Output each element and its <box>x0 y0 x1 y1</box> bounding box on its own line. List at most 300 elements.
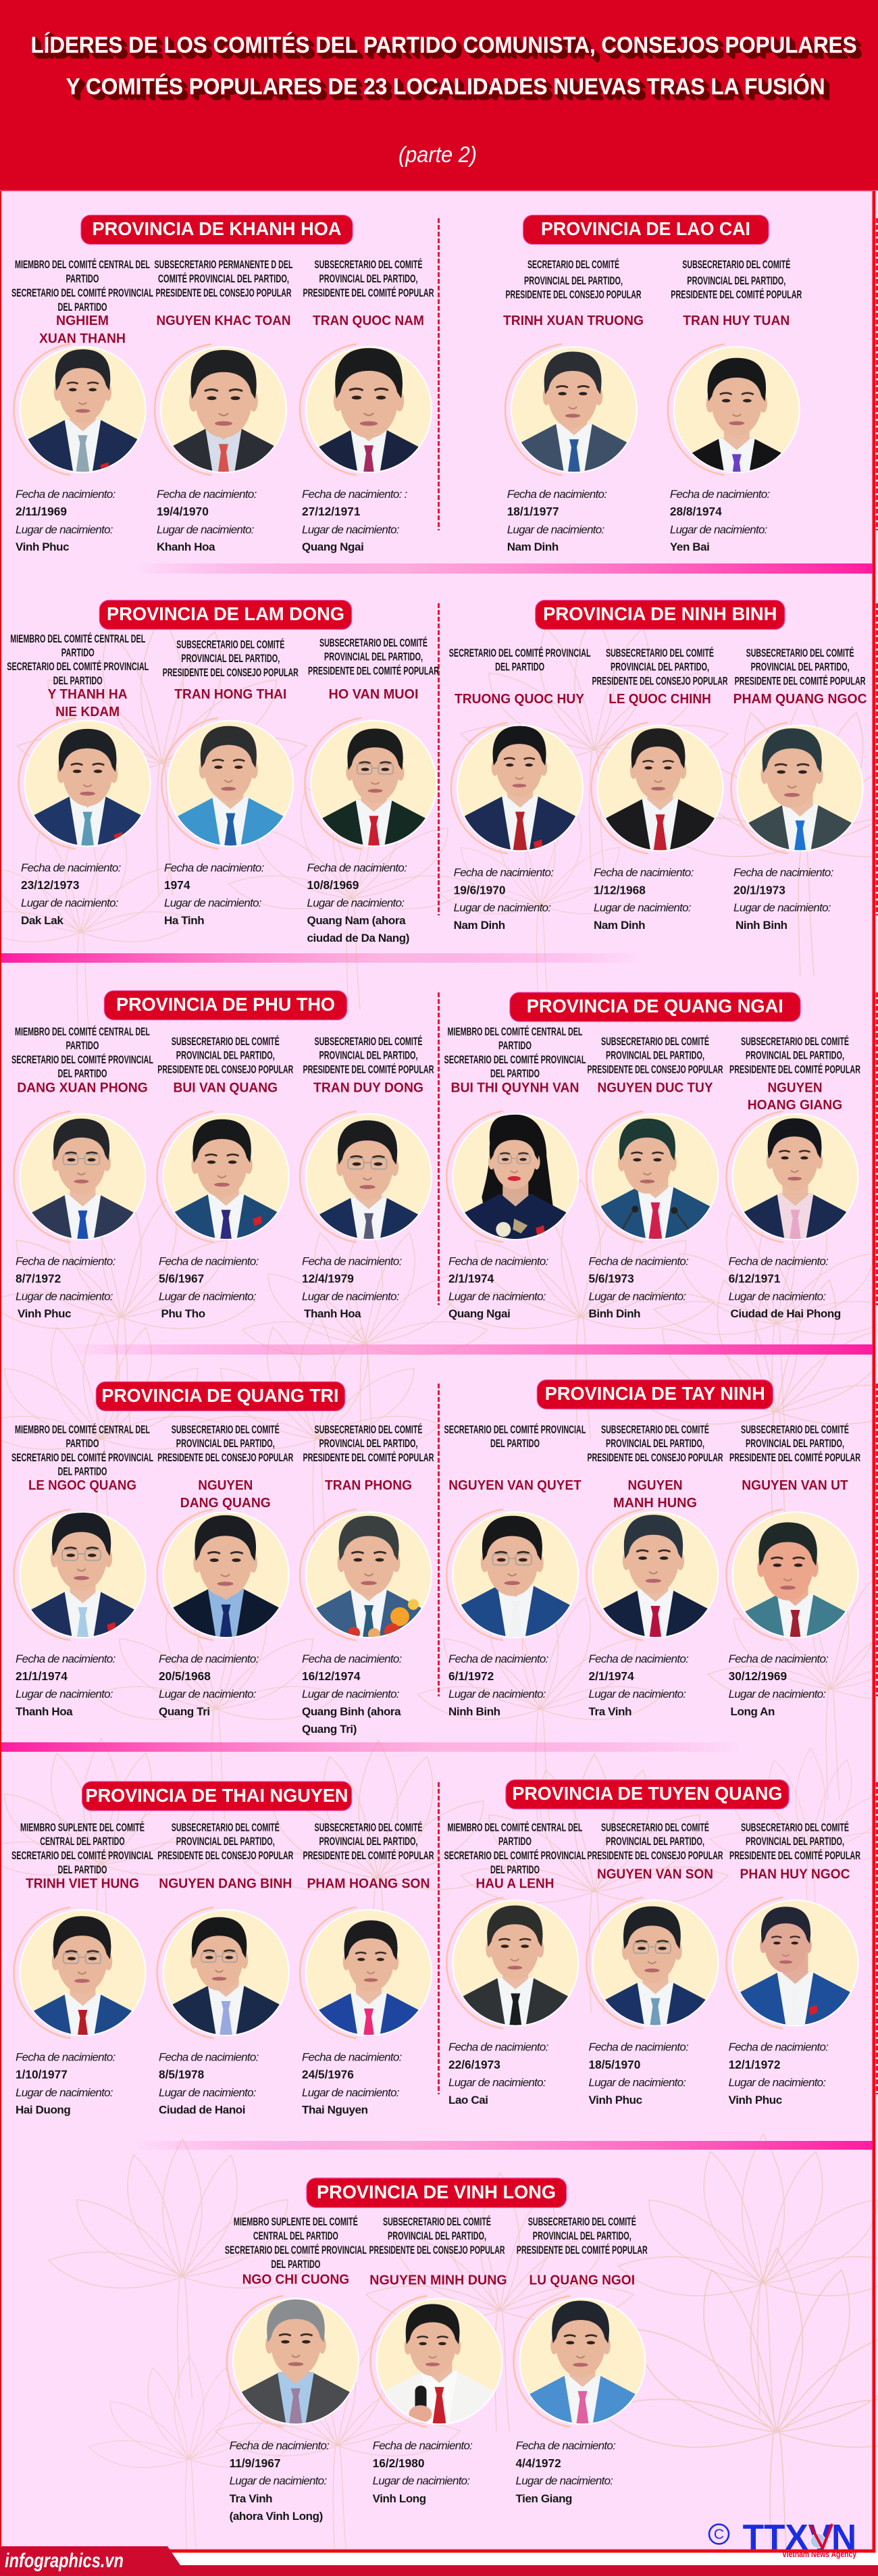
role: DEL PARTIDO <box>58 301 107 313</box>
footer band <box>0 2546 878 2576</box>
heading: Phu Tho: PROVINCIA DE PHU THO <box>116 994 335 1015</box>
name: LE NGOC QUANG <box>28 1478 136 1493</box>
role: SUBSECRETARIO DEL COMITÉ <box>601 1821 709 1834</box>
role: DEL PARTIDO <box>495 661 544 673</box>
portrait <box>157 1509 291 1653</box>
birth details: Lugar de nacimiento: <box>21 896 119 909</box>
birth details: Phu Tho <box>161 1307 205 1320</box>
role: SUBSECRETARIO DEL COMITÉ <box>601 1423 709 1436</box>
birth details <box>157 488 257 553</box>
name: TRAN DUY DONG <box>313 1080 423 1096</box>
birth details: (ahora Vinh Long) <box>230 2510 323 2523</box>
birth details: 12/1/1972 <box>729 2058 780 2071</box>
portrait <box>731 723 865 869</box>
role <box>588 1035 723 1076</box>
birth details <box>302 1255 403 1320</box>
birth details: Lugar de nacimiento: <box>302 1688 400 1700</box>
name: Y THANH HA <box>48 686 128 702</box>
role: PARTIDO <box>498 1836 532 1848</box>
birth details: Lugar de nacimiento: <box>589 1688 686 1700</box>
role <box>729 1423 860 1464</box>
name: TRINH XUAN TRUONG <box>503 313 644 328</box>
role: PROVINCIAL DEL PARTIDO, <box>533 2230 631 2242</box>
role: PROVINCIAL DEL PARTIDO, <box>388 2230 486 2242</box>
birth details: 16/2/1980 <box>373 2456 424 2470</box>
role <box>671 258 802 301</box>
birth details: Fecha de nacimiento: <box>373 2440 473 2452</box>
birth details: Fecha de nacimiento: <box>589 1652 689 1665</box>
role <box>588 1821 723 1862</box>
name: TRUONG QUOC HUY <box>455 691 584 707</box>
role: PRESIDENTE DEL COMITÉ POPULAR <box>517 2244 648 2256</box>
birth details: Lugar de nacimiento: <box>670 523 768 536</box>
birth details: 2/11/1969 <box>16 505 67 518</box>
birth details <box>507 488 607 553</box>
role: PARTIDO <box>66 1438 99 1450</box>
role <box>517 2215 648 2256</box>
role: SECRETARIO DEL COMITÉ PROVINCIAL <box>11 1451 153 1464</box>
portrait <box>300 1907 434 2057</box>
heading: Vinh Long <box>307 2178 567 2208</box>
leader: Trinh Xuan Truong <box>503 258 644 553</box>
name: NGUYEN MINH DUNG <box>369 2273 507 2288</box>
birth details: Lugar de nacimiento: <box>448 1290 546 1303</box>
birth details: Lugar de nacimiento: <box>373 2475 470 2487</box>
birth details: Lugar de nacimiento: <box>16 2086 113 2099</box>
name: TRAN QUOC NAM <box>313 313 424 328</box>
birth details <box>21 861 122 927</box>
leader: Nguyen Dang Binh <box>157 1821 293 2117</box>
role: SUBSECRETARIO DEL COMITÉ <box>528 2215 636 2228</box>
role: DEL PARTIDO <box>53 675 103 687</box>
birth details: Fecha de nacimiento: <box>594 866 694 879</box>
heading: Tay Ninh <box>537 1380 773 1409</box>
leader: Lu Quang Ngoi <box>513 2215 648 2505</box>
birth details: Fecha de nacimiento: <box>16 488 116 501</box>
birth details: Fecha de nacimiento: <box>729 1652 829 1665</box>
birth details: Ciudad de Hanoi <box>159 2104 245 2117</box>
birth details: Long An <box>731 1705 775 1718</box>
role: SUBSECRETARIO PERMANENTE D DEL <box>154 259 293 271</box>
birth details: Quang Tri <box>159 1705 210 1718</box>
name: NGUYEN DANG BINH <box>159 1875 292 1892</box>
birth details: Fecha de nacimiento: <box>729 1255 829 1267</box>
role <box>303 1821 434 1862</box>
birth details: Lugar de nacimiento: <box>159 1688 257 1700</box>
birth details: 20/5/1968 <box>159 1669 211 1683</box>
role <box>157 1821 293 1862</box>
leader: Pham Quang Ngoc <box>731 647 867 932</box>
birth details: Lugar de nacimiento: <box>16 1290 113 1303</box>
heading: Ninh Binh <box>536 600 785 630</box>
heading: Quang Ngai <box>510 992 800 1021</box>
portrait <box>586 1509 720 1655</box>
birth details <box>16 488 116 553</box>
portrait <box>14 344 147 484</box>
leader: Truong Quoc Huy <box>449 647 591 932</box>
header band <box>0 0 878 191</box>
birth details: Lugar de nacimiento: <box>589 2076 686 2089</box>
birth details: Yen Bai <box>670 540 710 553</box>
birth details <box>516 2440 616 2505</box>
birth details: Fecha de nacimiento: <box>302 1255 403 1267</box>
birth details: 8/7/1972 <box>16 1271 61 1285</box>
role <box>505 258 642 301</box>
panel: Provincia de Lam Dong <box>7 600 439 944</box>
role: PROVINCIAL DEL PARTIDO, <box>324 651 423 663</box>
birth details: Lugar de nacimiento: <box>589 1290 686 1303</box>
heading: Khanh Hoa <box>81 215 353 245</box>
birth details: Fecha de nacimiento: <box>733 866 834 879</box>
leader: Bui Van Quang <box>157 1035 293 1320</box>
birth details: Lugar de nacimiento: <box>230 2475 327 2487</box>
birth details <box>159 1652 259 1718</box>
leader: Ho Van Muoi <box>305 636 439 944</box>
leader: Bui Thi Quynh Van <box>444 1025 586 1320</box>
name: TRAN PHONG <box>325 1478 412 1493</box>
role <box>444 1821 586 1876</box>
leader: Nguyen Minh Dung <box>369 2215 507 2505</box>
role: SECRETARIO DEL COMITÉ PROVINCIAL <box>11 286 153 299</box>
role: PARTIDO <box>66 1040 99 1052</box>
birth details: Fecha de nacimiento: <box>159 1652 259 1665</box>
name: DANG XUAN PHONG <box>17 1080 148 1096</box>
birth details: Lugar de nacimiento: <box>729 1688 826 1700</box>
role: MIEMBRO DEL COMITÉ CENTRAL DEL <box>447 1821 582 1834</box>
title <box>31 31 856 100</box>
role: SECRETARIO DEL COMITÉ PROVINCIAL <box>444 1423 586 1436</box>
name: NGUYEN KHAC TOAN <box>157 313 290 328</box>
name: BUI VAN QUANG <box>174 1080 278 1096</box>
role <box>157 1423 293 1464</box>
birth details: Lugar de nacimiento: <box>454 901 551 914</box>
birth details: Khanh Hoa <box>157 540 215 553</box>
birth details <box>589 1652 689 1718</box>
birth details: Fecha de nacimiento: <box>448 1652 549 1665</box>
birth details: Ninh Binh <box>735 919 787 932</box>
birth details: Vinh Long <box>373 2492 426 2505</box>
birth details <box>589 2040 689 2106</box>
role: SECRETARIO DEL COMITÉ PROVINCIAL <box>449 647 591 659</box>
panel: Provincia de Phu Tho <box>11 990 434 1320</box>
birth details: 8/5/1978 <box>159 2067 205 2081</box>
role: MIEMBRO SUPLENTE DEL COMITÉ <box>234 2215 358 2228</box>
birth details: Fecha de nacimiento: <box>16 1255 116 1267</box>
birth details <box>302 2051 403 2117</box>
birth details: 5/6/1967 <box>159 1271 204 1285</box>
role: PROVINCIAL DEL PARTIDO, <box>319 273 417 285</box>
role <box>163 638 299 679</box>
birth details <box>454 866 554 932</box>
role: PROVINCIAL DEL PARTIDO, <box>687 275 785 287</box>
name: NGHIEM <box>56 313 109 328</box>
birth details: 5/6/1973 <box>589 1271 634 1285</box>
portrait <box>299 1111 432 1243</box>
subtitle: (parte 2) <box>398 142 477 167</box>
name: NGUYEN DUC TUY <box>597 1080 713 1096</box>
role: SECRETARIO DEL COMITÉ PROVINCIAL <box>11 1053 153 1066</box>
leader: Dang Xuan Phong <box>11 1025 153 1320</box>
role: PRESIDENTE DEL CONSEJO POPULAR <box>155 287 292 299</box>
birth details: Lugar de nacimiento: <box>733 901 831 914</box>
role <box>444 1025 586 1080</box>
role <box>588 1423 723 1464</box>
portrait <box>161 718 295 862</box>
portrait <box>446 1111 579 1243</box>
role: PARTIDO <box>498 1040 532 1052</box>
role: SUBSECRETARIO DEL COMITÉ <box>176 638 284 651</box>
name: MANH HUNG <box>613 1495 697 1511</box>
leader: Tran Phong <box>300 1423 434 1736</box>
portrait <box>19 718 153 861</box>
portrait <box>586 1898 720 2047</box>
leader: Nguyen Duc Tuy <box>586 1035 723 1320</box>
birth details: Vinh Phuc <box>589 2094 642 2106</box>
name: NGUYEN VAN UT <box>742 1478 848 1493</box>
name <box>748 1080 842 1113</box>
portrait <box>505 344 639 488</box>
role: CENTRAL DEL PARTIDO <box>40 1836 125 1848</box>
birth details: Fecha de nacimiento: <box>307 861 407 874</box>
role: PROVINCIAL DEL PARTIDO, <box>606 1438 704 1450</box>
birth details: Tien Giang <box>516 2492 572 2505</box>
name: HAU A LENH <box>475 1875 554 1892</box>
birth details: Fecha de nacimiento: <box>448 1255 549 1267</box>
birth details <box>594 866 694 932</box>
birth details: Lugar de nacimiento: <box>448 1688 546 1700</box>
birth details <box>230 2440 330 2523</box>
name: NGUYEN <box>628 1478 682 1493</box>
birth details <box>159 2051 259 2117</box>
panel: Provincia de Khanh Hoa <box>11 215 434 553</box>
birth details: Lugar de nacimiento: <box>729 1290 826 1303</box>
name <box>613 1478 697 1511</box>
birth details <box>448 2040 549 2106</box>
birth details: Hai Duong <box>16 2104 70 2117</box>
birth details: 10/8/1969 <box>307 878 359 892</box>
birth details: Tra Vinh <box>589 1705 631 1718</box>
role: DEL PARTIDO <box>58 1466 107 1478</box>
birth details: Fecha de nacimiento: <box>16 1652 116 1665</box>
role: PROVINCIAL DEL PARTIDO, <box>524 275 623 287</box>
birth details: Fecha de nacimiento: <box>157 488 257 501</box>
birth details: Lugar de nacimiento: <box>16 1688 113 1700</box>
role <box>444 1423 586 1450</box>
birth details <box>307 861 409 944</box>
portrait <box>446 1898 580 2042</box>
birth details: 1974 <box>164 878 190 892</box>
role: DEL PARTIDO <box>58 1864 107 1876</box>
role: PROVINCIAL DEL PARTIDO, <box>176 1050 275 1062</box>
birth details <box>729 2040 829 2106</box>
role: SUBSECRETARIO DEL COMITÉ <box>315 1821 423 1834</box>
birth details: Fecha de nacimiento: <box>448 2040 549 2053</box>
birth details: Lugar de nacimiento: <box>302 523 400 536</box>
birth details <box>729 1255 841 1320</box>
dashed column separators <box>439 218 877 2094</box>
birth details: 27/12/1971 <box>302 505 361 518</box>
birth details: 11/9/1967 <box>230 2456 281 2470</box>
heading: Phu Tho <box>104 990 347 1020</box>
birth details <box>159 1255 259 1320</box>
heading: Lao Cai: PROVINCIA DE LAO CAI <box>541 218 750 239</box>
birth details: Fecha de nacimiento: <box>589 1255 689 1267</box>
name <box>48 686 128 719</box>
title: Y COMITÉS POPULARES DE 23 LOCALIDADES NUEVAS TRAS LA FUSIÓN <box>66 73 825 100</box>
role: DEL PARTIDO <box>490 1067 540 1080</box>
birth details: Nam Dinh <box>594 919 645 932</box>
leader: Nguyen Van Quyet <box>444 1423 586 1718</box>
birth details: Fecha de nacimiento: <box>159 2051 259 2063</box>
birth details: Vinh Phuc <box>16 540 69 553</box>
birth details: 6/1/1972 <box>448 1669 494 1683</box>
name: NGUYEN VAN QUYET <box>448 1478 582 1493</box>
birth details <box>373 2440 473 2505</box>
birth details: Lao Cai <box>448 2094 488 2106</box>
role: PRESIDENTE DEL COMITÉ POPULAR <box>303 286 434 299</box>
birth details: Quang Ngai <box>302 540 363 553</box>
leader: Nguyen Hoang Giang <box>726 1035 860 1320</box>
role: PRESIDENTE DEL CONSEJO POPULAR <box>588 1063 723 1076</box>
portrait <box>299 343 432 476</box>
portrait <box>157 1111 291 1259</box>
role: PARTIDO <box>61 647 95 659</box>
name: NGUYEN VAN SON <box>597 1866 713 1882</box>
birth details: Fecha de nacimiento: <box>159 1255 259 1267</box>
heading: Lam Dong <box>99 600 352 630</box>
birth details: Fecha de nacimiento: <box>670 488 770 501</box>
role: SECRETARIO DEL COMITÉ PROVINCIAL <box>225 2244 367 2256</box>
heading: Quang Ngai: PROVINCIA DE QUANG NGAI <box>527 996 783 1016</box>
name: NGUYEN <box>767 1080 823 1096</box>
role: SUBSECRETARIO DEL COMITÉ <box>315 1423 423 1436</box>
birth details: 22/6/1973 <box>448 2058 500 2071</box>
role: PROVINCIAL DEL PARTIDO, <box>181 653 280 665</box>
birth details <box>16 1652 116 1718</box>
leader: Pham Hoang Son <box>300 1821 434 2117</box>
logo: TTXVN: TTXVN <box>743 2517 856 2558</box>
birth details: Fecha de nacimiento: <box>21 861 122 874</box>
role: DEL PARTIDO <box>58 1067 107 1080</box>
panel: Provincia de Tay Ninh <box>444 1380 860 1718</box>
role: PROVINCIAL DEL PARTIDO, <box>319 1050 417 1062</box>
role: SUBSECRETARIO DEL COMITÉ <box>601 1035 709 1048</box>
birth details: Dak Lak <box>21 914 63 927</box>
birth details: Vinh Phuc <box>18 1307 71 1320</box>
portrait <box>726 1509 860 1659</box>
leader: Nguyen Manh Hung <box>586 1423 723 1718</box>
role: PROVINCIAL DEL PARTIDO, <box>319 1836 417 1848</box>
section dividers <box>1 563 873 2150</box>
name: PHAN HUY NGOC <box>740 1866 850 1882</box>
leader: Tran Quoc Nam <box>300 258 434 553</box>
portrait <box>157 1907 291 2050</box>
birth details: 20/1/1973 <box>733 884 785 897</box>
leader: Nguyen Van Son <box>586 1821 723 2106</box>
role: MIEMBRO DEL COMITÉ CENTRAL DEL <box>15 1025 150 1038</box>
leader: Le Ngoc Quang <box>11 1423 153 1718</box>
role <box>7 632 149 687</box>
heading: Khanh Hoa: PROVINCIA DE KHANH HOA <box>92 218 342 239</box>
birth details: Fecha de nacimiento: <box>16 2051 116 2063</box>
birth details: Lugar de nacimiento: <box>164 896 262 909</box>
role <box>592 647 728 687</box>
role: PRESIDENTE DEL CONSEJO POPULAR <box>157 1452 293 1464</box>
portrait <box>370 2296 504 2435</box>
role: SECRETARIO DEL COMITÉ PROVINCIAL <box>444 1849 586 1862</box>
portrait <box>513 2296 647 2440</box>
name: DANG QUANG <box>180 1495 271 1511</box>
birth details: Ha Tinh <box>164 914 204 927</box>
birth details: 16/12/1974 <box>302 1669 361 1683</box>
birth details: 30/12/1969 <box>729 1669 787 1683</box>
birth details: 4/4/1972 <box>516 2456 561 2470</box>
heading: Lam Dong: PROVINCIA DE LAM DONG <box>107 603 344 624</box>
leader: Trinh Viet Hung <box>11 1821 153 2117</box>
heading: Tay Ninh: PROVINCIA DE TAY NINH <box>545 1383 765 1404</box>
name: TRAN HUY TUAN <box>683 313 790 328</box>
role: SUBSECRETARIO DEL COMITÉ <box>172 1821 280 1834</box>
heading: Thai Nguyen: PROVINCIA DE THAI NGUYEN <box>85 1785 348 1806</box>
portrait <box>14 1907 147 2059</box>
birth details: Fecha de nacimiento: <box>454 866 554 879</box>
footer site label: infographics.vn <box>5 2550 124 2572</box>
role <box>308 636 439 678</box>
role: PROVINCIAL DEL PARTIDO, <box>606 1050 704 1062</box>
leader: Nguyen Khac Toan <box>154 259 293 553</box>
birth details: Lugar de nacimiento: <box>516 2475 613 2487</box>
name <box>180 1478 271 1511</box>
birth details <box>589 1255 689 1320</box>
leader: Nghiem Xuan Thanh <box>11 258 153 553</box>
leader: Y Thanh Ha Nie Kdam <box>7 632 153 927</box>
role: SUBSECRETARIO DEL COMITÉ <box>383 2215 491 2228</box>
birth details: Fecha de nacimiento: <box>729 2040 829 2053</box>
birth details: Lugar de nacimiento: <box>729 2076 826 2089</box>
leader: Hau A Lenh <box>444 1821 586 2106</box>
leader: Tran Huy Tuan <box>668 258 802 553</box>
birth details <box>16 1255 116 1320</box>
birth details <box>448 1255 549 1320</box>
role: DEL PARTIDO <box>271 2258 321 2271</box>
name <box>39 313 126 346</box>
birth details: Lugar de nacimiento: <box>16 523 113 536</box>
birth details: 1/10/1977 <box>16 2067 68 2081</box>
role: SECRETARIO DEL COMITÉ PROVINCIAL <box>444 1053 586 1066</box>
birth details: Lugar de nacimiento: <box>302 2086 400 2099</box>
background lotus pattern <box>0 612 878 2576</box>
role: SECRETARIO DEL COMITÉ PROVINCIAL <box>11 1849 153 1862</box>
birth details: Thanh Hoa <box>16 1705 73 1718</box>
birth details <box>729 1652 829 1718</box>
role: SUBSECRETARIO DEL COMITÉ <box>172 1423 280 1436</box>
role: PROVINCIAL DEL PARTIDO, <box>606 1836 704 1848</box>
heading: Ninh Binh: PROVINCIA DE NINH BINH <box>543 603 777 624</box>
portrait <box>726 1111 860 1259</box>
role <box>225 2215 367 2271</box>
birth details: Quang Ngai <box>448 1307 510 1320</box>
heading: Quang Tri: PROVINCIA DE QUANG TRI <box>101 1385 339 1406</box>
birth details: Fecha de nacimiento: <box>302 1652 403 1665</box>
birth details: Fecha de nacimiento: <box>516 2440 616 2452</box>
leader: Tran Hong Thai <box>161 638 299 927</box>
name: BUI THI QUYNH VAN <box>451 1080 579 1096</box>
role <box>729 1035 860 1076</box>
leader: Tran Duy Dong <box>300 1035 434 1320</box>
role: PRESIDENTE DEL CONSEJO POPULAR <box>157 1063 293 1076</box>
birth details <box>164 861 265 927</box>
birth details <box>670 488 770 553</box>
